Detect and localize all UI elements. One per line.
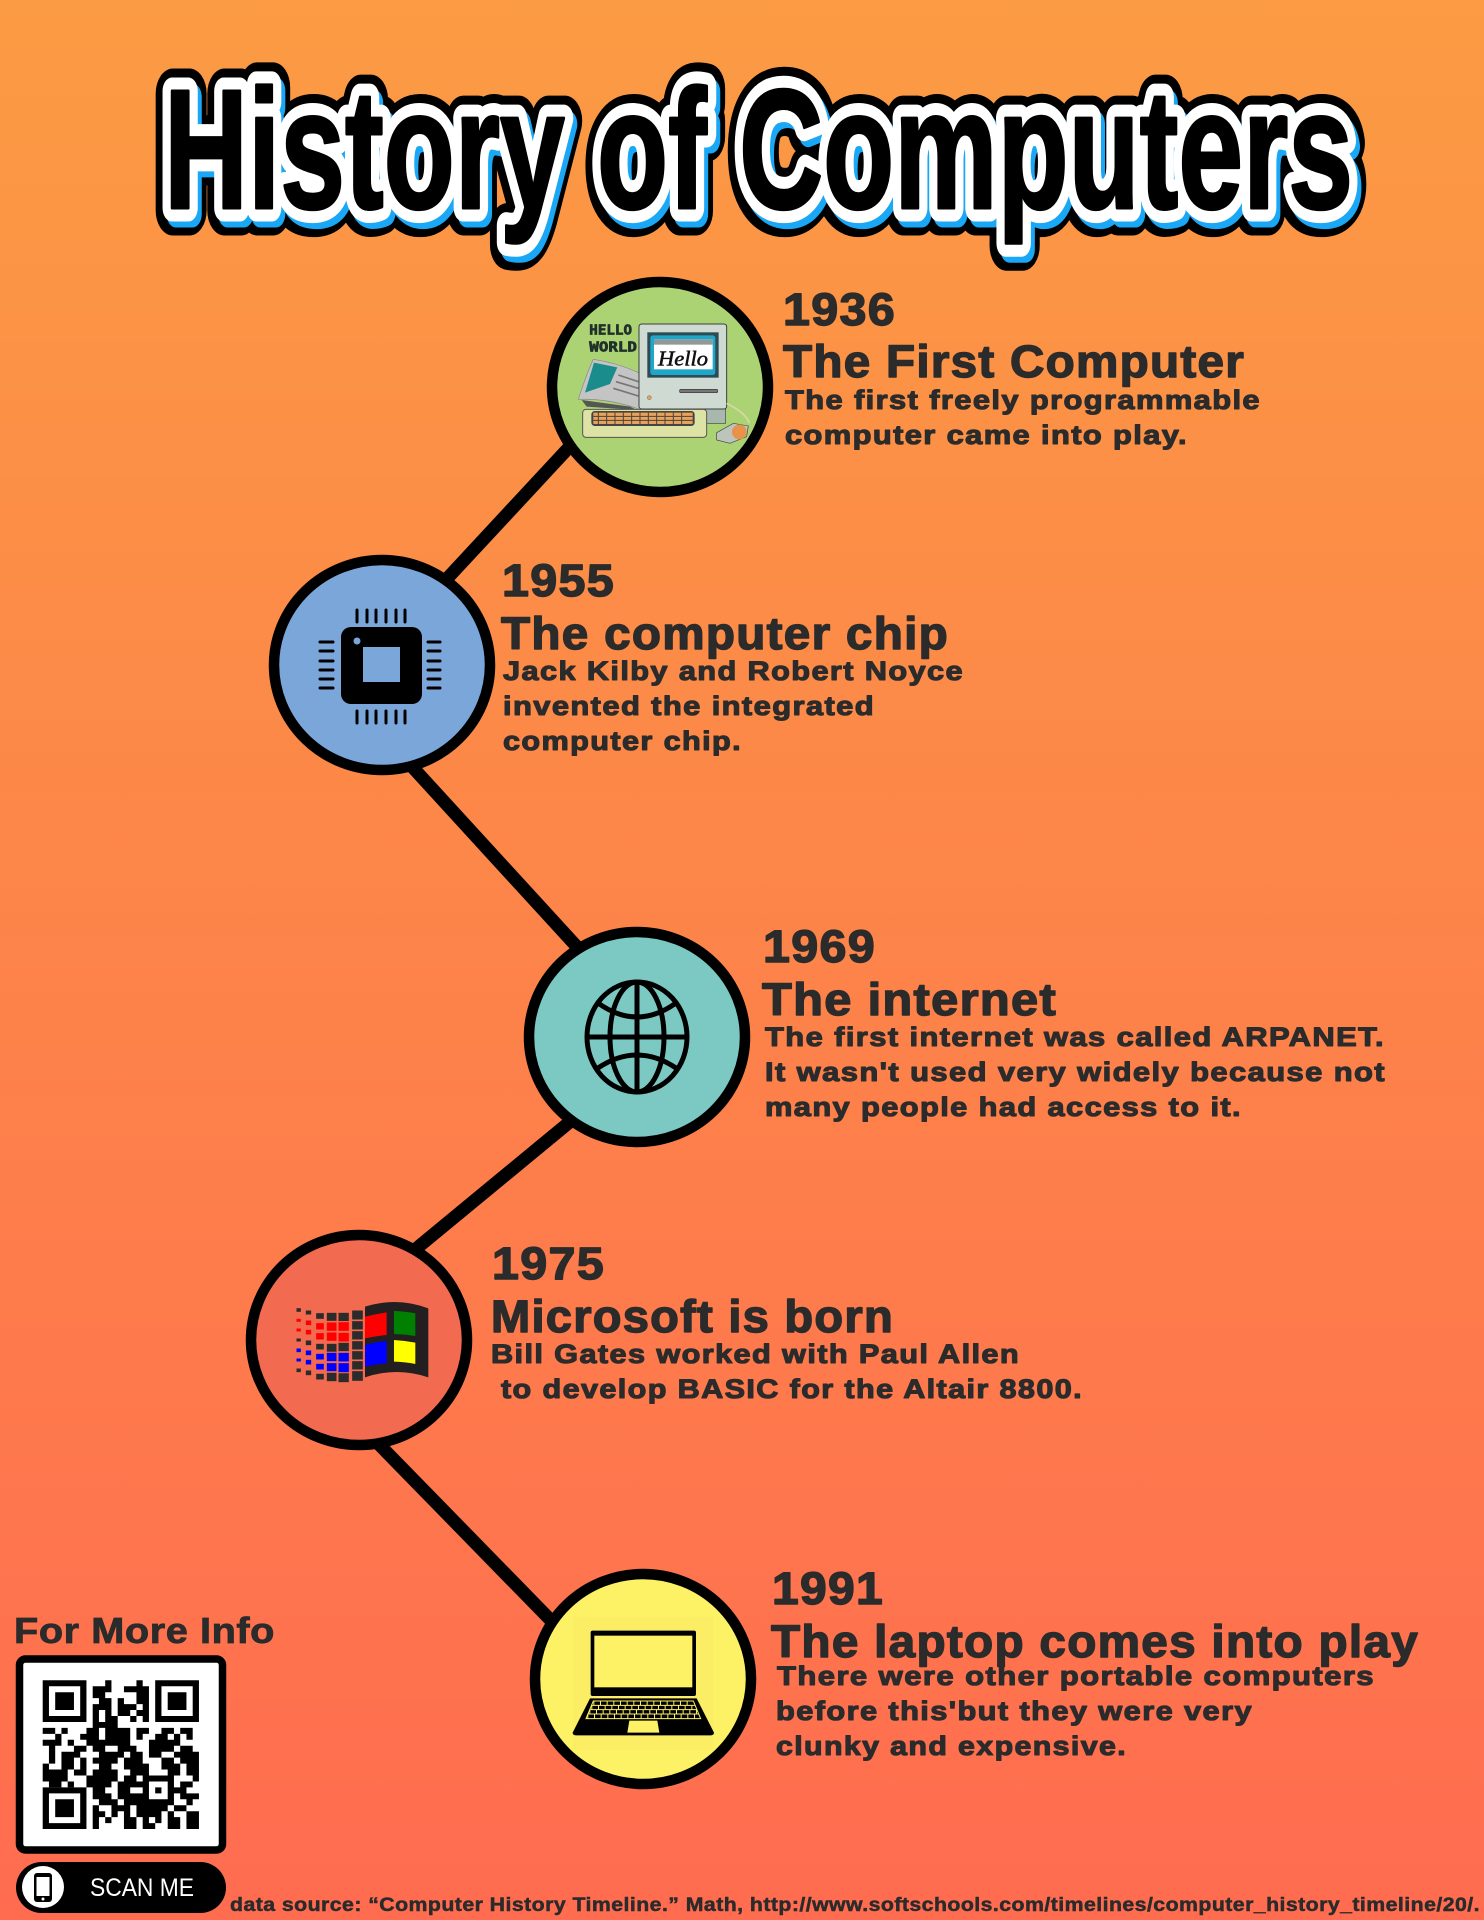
milestone text: 1991: [771, 1563, 1419, 1761]
milestone text: 1936: The First Computer: [783, 336, 1245, 387]
milestone circle: 1936: [552, 282, 768, 492]
milestone text: 1955: The computer chip: [501, 608, 949, 659]
milestone text: 1991: 1991: [772, 1563, 884, 1614]
milestone text: 1955: computer chip.: [503, 726, 742, 756]
milestone text: 1969: The first internet was called ARPANET.: [765, 1022, 1385, 1052]
icon: laptop: [573, 1617, 714, 1750]
milestone text: 1991: clunky and expensive.: [776, 1731, 1127, 1761]
milestone circle: 1955: [274, 560, 490, 770]
milestone text: 1936: [783, 284, 1261, 450]
qr code: [20, 1659, 222, 1850]
icon: computer chip: [320, 610, 440, 723]
milestone circle: 1975: [251, 1235, 467, 1445]
milestone text: 1969: 1969: [763, 921, 876, 972]
milestone text: 1936: computer came into play.: [785, 420, 1188, 450]
milestone text: 1955: 1955: [502, 555, 615, 606]
milestone text: 1991: The laptop comes into play: [771, 1616, 1419, 1667]
milestone text: 1936: The first freely programmable: [785, 385, 1261, 415]
milestone text: 1969: It wasn't used very widely because not: [765, 1057, 1386, 1087]
milestone text: 1975: to develop BASIC for the Altair 8800.: [501, 1374, 1083, 1404]
qr section heading: For More Info: [14, 1610, 275, 1651]
icon: vintage computer: WORLD: [589, 340, 637, 355]
icon: globe: [587, 982, 687, 1092]
icon: windows flag: [296, 1302, 428, 1383]
milestone text: 1955: invented the integrated: [503, 691, 875, 721]
milestone text: 1955: [501, 555, 964, 756]
icon: phone: [22, 1866, 64, 1908]
data source citation: data source: “Computer History Timeline.” Math, http://www.softschools.com/timelines/computer_history_timeline/20/.: [230, 1895, 1480, 1916]
icon: vintage computer: Hello: [657, 348, 708, 370]
timeline connector lines: [365, 414, 600, 1640]
icon: vintage computer: HELLO: [589, 324, 632, 339]
milestone text: 1969: The internet: [762, 974, 1057, 1025]
milestone text: 1975: Microsoft is born: [491, 1291, 894, 1342]
milestone circle: 1991: [535, 1574, 751, 1784]
milestone text: 1975: 1975: [492, 1238, 605, 1289]
milestone text: 1991: There were other portable computers: [777, 1661, 1375, 1691]
milestone text: 1955: Jack Kilby and Robert Noyce: [503, 656, 964, 686]
milestone text: 1936: 1936: [783, 284, 896, 335]
milestone text: 1991: before this'but they were very: [776, 1696, 1253, 1726]
scan me badge: [16, 1862, 226, 1913]
milestone text: 1975: Bill Gates worked with Paul Allen: [491, 1339, 1020, 1369]
icon: vintage computer: [578, 324, 749, 443]
milestone text: 1975: [491, 1238, 1083, 1404]
milestone text: 1969: many people had access to it.: [765, 1092, 1242, 1122]
milestone circle: 1969: [529, 932, 745, 1142]
milestone text: 1969: [762, 921, 1386, 1122]
scan me badge: SCAN ME: [90, 1874, 194, 1902]
